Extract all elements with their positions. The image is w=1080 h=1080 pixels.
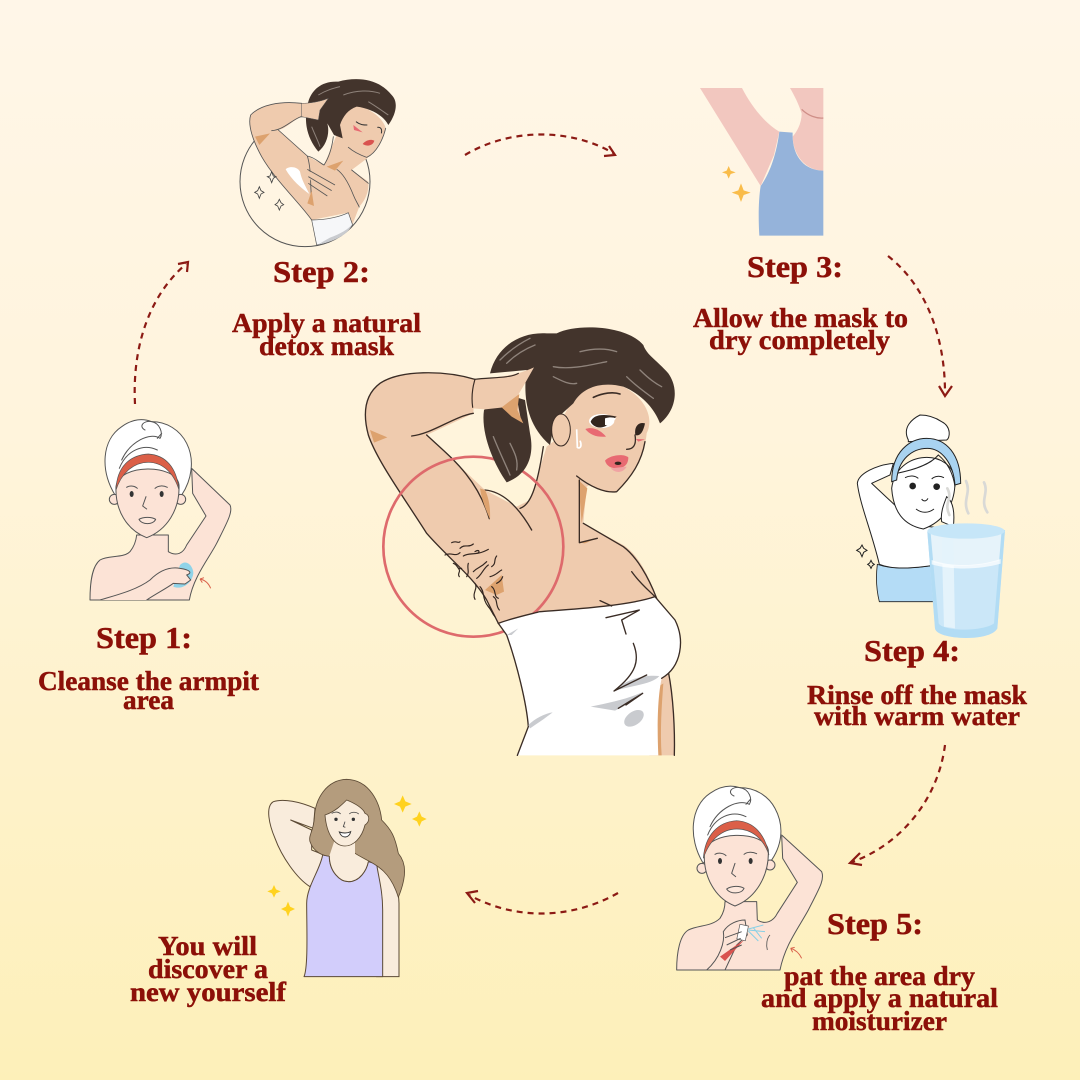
text: step 2: Apply a natural	[232, 308, 422, 338]
text: step 4	[807, 633, 1027, 731]
hand	[100, 568, 191, 600]
arrow: step 5 to result	[467, 891, 618, 914]
hair	[310, 779, 405, 897]
towel	[498, 597, 680, 755]
highlight circle	[383, 457, 563, 637]
hair	[306, 79, 396, 152]
face	[116, 469, 179, 538]
blue tank top	[759, 132, 823, 236]
text: step 1: Step 1:	[96, 620, 192, 655]
step 3 illustration: underarm with drying mask	[700, 88, 823, 236]
lilac tank top	[304, 855, 383, 977]
text: step 5: pat the area dry	[784, 961, 976, 991]
red headband	[116, 454, 179, 490]
right arm	[377, 865, 399, 977]
text: step 5	[761, 906, 999, 1036]
right arm behind towel	[649, 672, 674, 755]
arrow: step 2 to step 3	[465, 134, 615, 156]
text: step 3: Allow the mask to	[693, 303, 908, 333]
hair: head	[490, 327, 675, 445]
text: result	[130, 931, 287, 1007]
body and arm	[250, 103, 368, 224]
text: step 1: Cleanse the armpit	[38, 666, 259, 696]
arrow: step 3 to step 4	[888, 256, 952, 396]
body	[677, 835, 823, 970]
scrub sponge	[173, 563, 193, 588]
steam	[947, 481, 987, 515]
raised arm	[269, 800, 328, 887]
arm and torso	[857, 463, 947, 568]
face	[338, 105, 386, 157]
underarm line	[767, 935, 770, 950]
ears	[109, 494, 186, 504]
text: step 1: area	[123, 685, 175, 715]
hand on cheek	[941, 497, 954, 527]
arrow: step 1 to step 2	[135, 262, 188, 404]
ears	[697, 860, 775, 873]
hand of raised arm	[302, 98, 328, 120]
text: step 3	[693, 249, 908, 355]
result illustration: woman with clear skin	[267, 779, 427, 977]
sparkles	[857, 545, 874, 568]
sparkles	[255, 172, 284, 210]
step 5 illustration: applying moisturizer	[677, 786, 823, 970]
text: step 4: Rinse off the mask	[807, 680, 1027, 710]
text: step 3: dry completely	[709, 325, 891, 355]
step 2 illustration: applying detox mask	[240, 79, 396, 247]
text: step 2: detox mask	[259, 331, 394, 361]
hair bun	[906, 415, 949, 442]
text: step 2	[232, 254, 422, 361]
text: step 4: Step 4:	[864, 633, 960, 668]
hair: ponytail	[483, 393, 531, 482]
text: step 1	[38, 620, 259, 715]
text: step 5: Step 5:	[827, 906, 923, 941]
text: step 2: Step 2:	[273, 254, 370, 289]
face	[704, 835, 768, 906]
arrow: step 4 to step 5	[850, 745, 945, 865]
face	[892, 455, 955, 529]
step 4 illustration: rinse with warm water	[857, 415, 1005, 638]
towel bottom	[876, 564, 937, 602]
collarbone line	[802, 109, 823, 118]
spray bottle and hand	[707, 920, 748, 970]
white towel turban	[693, 786, 781, 862]
central illustration: woman with underarm hair	[365, 327, 680, 755]
sparkles	[722, 166, 751, 202]
towel	[312, 213, 353, 245]
red headband	[703, 821, 769, 858]
face and neck	[557, 384, 649, 492]
mask cream	[286, 167, 309, 194]
text: result: discover a	[148, 954, 269, 984]
ear	[552, 414, 570, 446]
body	[90, 468, 231, 600]
white towel turban	[105, 420, 191, 495]
text: step 4: with warm water	[814, 701, 1020, 731]
yellow sparkles	[267, 795, 427, 917]
blue headband	[892, 438, 961, 485]
glass of water	[927, 523, 1005, 638]
small red arrow	[200, 578, 211, 588]
text: step 3: Step 3:	[747, 249, 843, 284]
small red arrow	[791, 947, 802, 958]
underarm hair	[445, 542, 503, 617]
hand on chest	[307, 169, 359, 207]
text: result: new yourself	[130, 977, 287, 1007]
text: step 5: moisturizer	[812, 1006, 947, 1036]
neck and face	[325, 800, 369, 882]
spray mist	[748, 925, 765, 941]
step 1 illustration: cleansing the armpit	[90, 420, 231, 600]
raised arm and torso skin	[365, 373, 657, 623]
text: step 5: and apply a natural	[761, 983, 999, 1013]
text: result: You will	[158, 931, 258, 961]
hand holding hair	[472, 367, 534, 423]
circle frame	[240, 117, 370, 247]
arm and shoulder skin	[700, 88, 823, 186]
hair highlights	[493, 338, 662, 475]
